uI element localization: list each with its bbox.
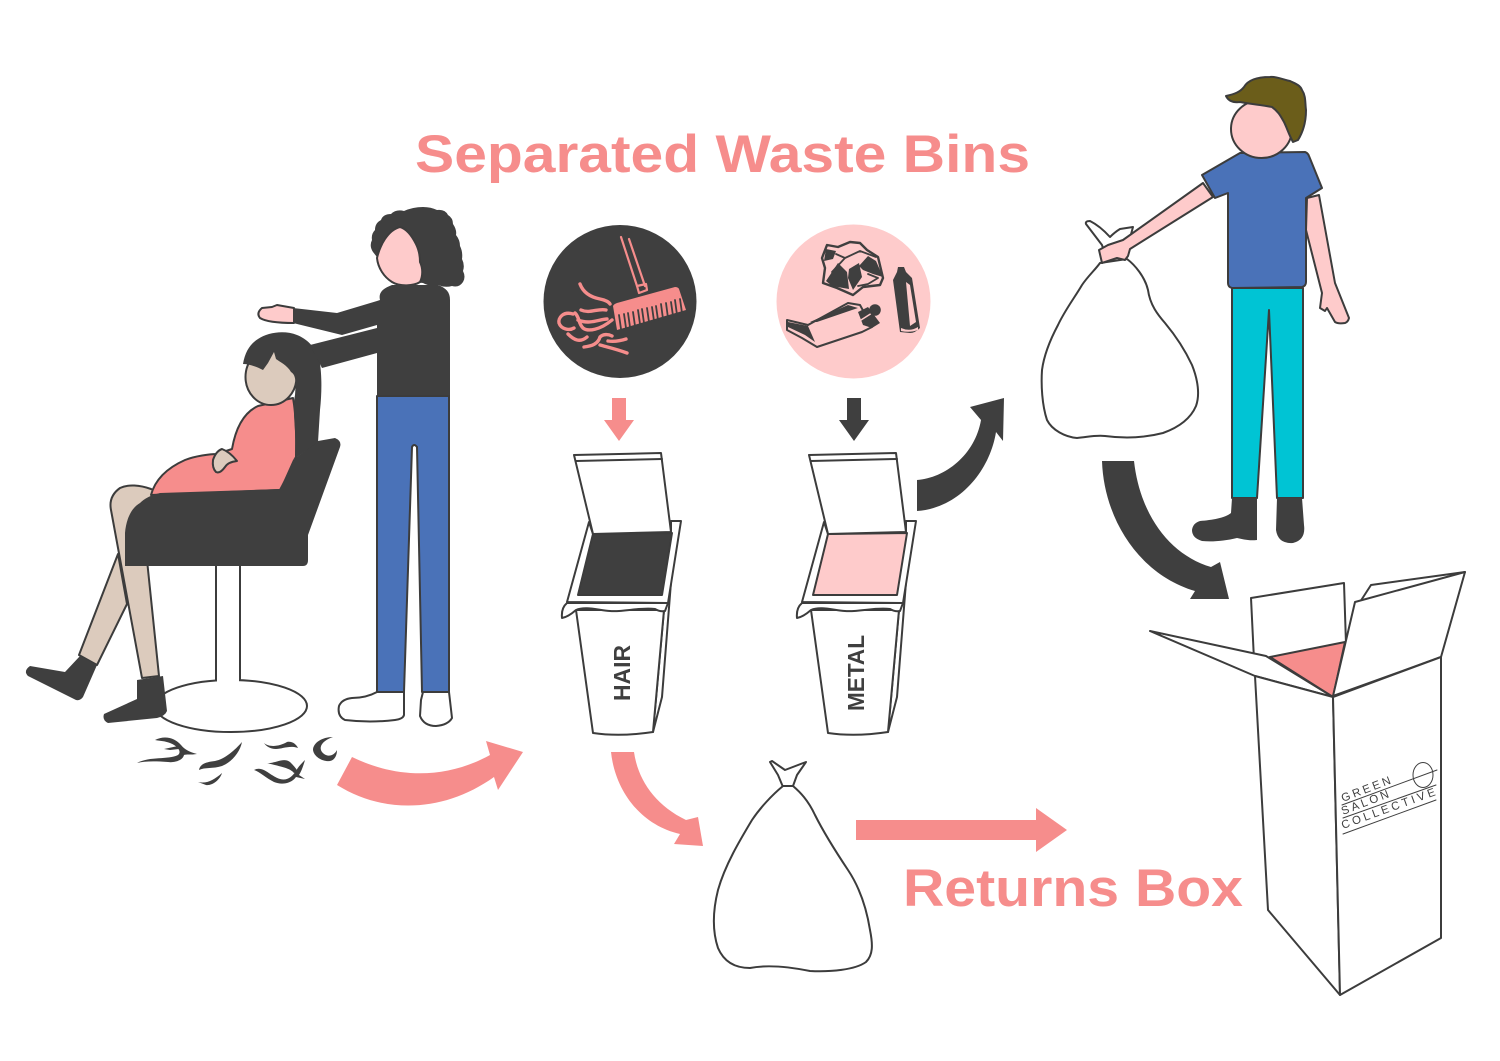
bin lid [809,453,906,534]
client near leg [110,485,165,678]
client far boot [26,656,97,700]
logo: Green Salon Collective: SALON [1340,789,1391,818]
metal bin [797,453,916,735]
heading: Returns Box: Returns Box [903,859,1244,918]
arrow: chair to hair bin [337,741,523,806]
logo: Green Salon Collective [1340,762,1437,834]
arrow: metal down to bin [839,398,869,441]
arrow: bag to returns box [856,808,1067,852]
man hair [1226,77,1306,142]
stylist trousers [377,396,449,692]
box interior [1270,642,1345,697]
left face [1255,676,1340,995]
man boots [1192,498,1304,543]
label: HAIR: HAIR [609,645,635,701]
man trousers [1232,288,1303,498]
icon: sweeping hair circle [544,225,696,378]
arm and hand [1099,183,1213,263]
arrow: hair down to bin [604,398,634,441]
bin side [653,582,671,732]
man shirt [1202,152,1322,288]
bin frame [802,521,916,603]
stylist left shoe [339,692,404,722]
stylist upper body [293,285,450,396]
arrow: metal bin to man with bag [917,398,1004,511]
logo: Green Salon Collective: COLLECTIVE [1340,787,1437,832]
figure: stylist [258,207,464,726]
bin rim [562,603,668,618]
front face [1333,657,1441,995]
right flap [1360,572,1465,602]
label: METAL: METAL [843,635,869,711]
logo: Green Salon Collective: GREEN [1340,775,1393,805]
icon: hair clippings [137,737,337,785]
aerosol can [893,267,920,333]
bin rim [797,603,903,618]
client dress [151,398,296,495]
icon: metal waste circle [776,224,930,378]
back flap [1251,583,1346,660]
paint tube [787,303,872,347]
chair base [155,560,307,732]
hair waste bag [714,761,872,971]
client far leg [79,554,127,665]
bin body [576,610,664,735]
client hand [213,449,237,472]
stylist face [377,227,422,285]
figure: client in salon chair [26,332,340,732]
bin lid [574,453,671,534]
left flap [1150,631,1333,697]
arrow: man with bag to returns box [1102,461,1229,599]
bin side [888,582,906,732]
foil ball [822,242,883,295]
client head [246,349,296,405]
stylist hand [258,305,294,323]
man other arm [1306,195,1349,323]
arrow: hair bin to bag [611,752,703,846]
stylist right shoe [420,692,452,726]
hair bin [562,453,681,735]
bin opening [578,533,672,595]
bin opening [813,533,907,595]
bin frame [567,521,681,603]
held bag [1042,221,1198,438]
returns box [1150,572,1465,995]
figure: man with metal bag [1042,77,1349,543]
title: Separated Waste Bins: Separated Waste Bins [415,125,1030,184]
stylist hair [371,207,464,287]
man head [1231,100,1292,158]
salon chair [125,438,340,566]
client hair [243,332,321,460]
client near boot [104,676,167,723]
bin body [811,610,899,735]
